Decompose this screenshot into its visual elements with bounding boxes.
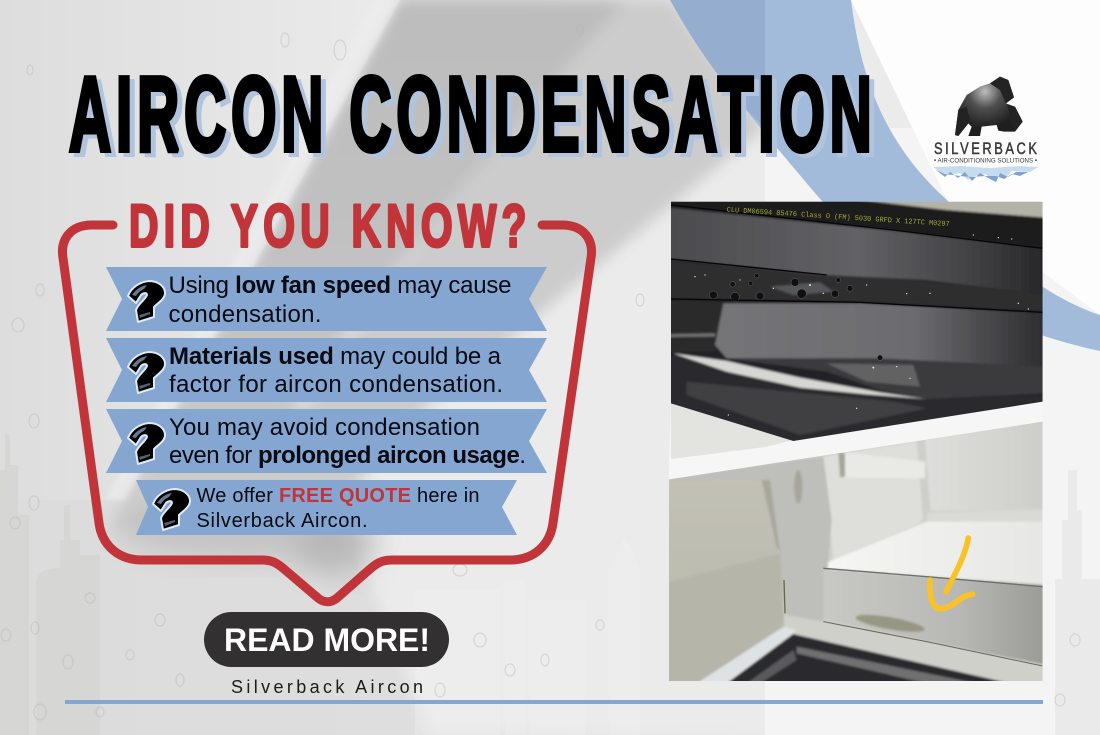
logo wordmark: SILVERBACK [934, 141, 1040, 158]
ribbon 1 text [168, 272, 512, 328]
ribbon 4 text: Silverback Aircon. [196, 510, 368, 532]
ribbon 2: materials used [106, 338, 547, 402]
icon: question mark [128, 423, 165, 464]
title: AIRCON CONDENSATION [69, 56, 877, 174]
background: faint city skyline [0, 435, 1100, 735]
ribbon 3 text: even for prolonged aircon usage. [169, 442, 526, 469]
button: read more [204, 612, 449, 667]
photo: mould on white ledge [663, 417, 1050, 687]
brand caption: Silverback Aircon [231, 677, 423, 697]
heading: did you know: DID YOU KNOW? [129, 193, 532, 259]
ribbon 1 text: condensation. [168, 301, 322, 328]
ribbon 4 text: We offer FREE QUOTE here in [196, 485, 480, 507]
ribbon 1 text: Using low fan speed may cause [168, 272, 512, 299]
icon: question mark [128, 281, 165, 322]
arrow: yellow annotation [930, 538, 973, 609]
photo: wet insulated pipes [667, 195, 1047, 445]
ribbon 3 text [169, 414, 526, 469]
ribbon 1: low fan speed [106, 267, 547, 331]
blue decorative arc [670, 0, 1100, 351]
ribbon 3 text: You may avoid condensation [169, 414, 480, 441]
logo: Silverback [933, 77, 1040, 182]
button: read more: READ MORE! [224, 622, 430, 658]
icon: gorilla [955, 77, 1023, 136]
ribbon 2 text: factor for aircon condensation. [169, 371, 503, 398]
ribbon 4: free quote [136, 480, 517, 535]
footer rule [65, 700, 1043, 704]
ribbon 2 text: Materials used may could be a [169, 343, 502, 370]
ribbon 2 text [169, 343, 503, 398]
ribbon 3: prolonged usage [106, 409, 547, 473]
icon: question mark [153, 489, 190, 530]
ribbon 4 text [196, 485, 480, 532]
speech bubble frame [62, 225, 592, 602]
logo tagline: • AIR-CONDITIONING SOLUTIONS • [934, 158, 1037, 164]
icon: question mark [128, 352, 165, 393]
photo band: white divider [669, 402, 1043, 481]
pipe print text: CLU DM06594 85476 Class O (FM) 5030 GRFD X 127TC M0297 [726, 207, 950, 229]
icon: ice drip [933, 166, 1038, 182]
